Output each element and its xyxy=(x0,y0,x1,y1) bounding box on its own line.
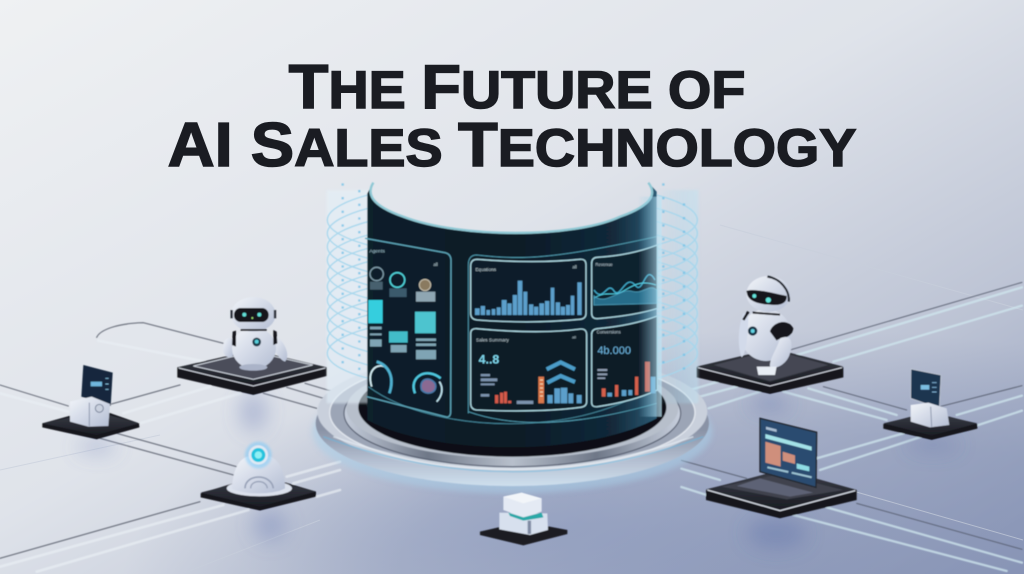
panel: device metrics xyxy=(365,238,451,417)
node: laptop xyxy=(706,418,857,518)
title xyxy=(168,52,856,180)
holographic coil left and right xyxy=(327,180,698,403)
panel: bar chart xyxy=(468,237,657,422)
panel: line chart: Revenue xyxy=(595,262,613,267)
gauges xyxy=(370,362,442,402)
node: left monitor device xyxy=(42,365,139,439)
status icons xyxy=(370,267,435,302)
metric blocks xyxy=(368,300,436,359)
node: right monitor device xyxy=(883,369,977,440)
panel: bar chart: all xyxy=(572,265,577,270)
panel: device metrics: Agents xyxy=(369,249,385,255)
panel: bar chart: Equations xyxy=(475,267,497,272)
robot body right xyxy=(739,276,793,375)
panel: value xyxy=(592,316,657,407)
right network nodes xyxy=(681,276,1022,571)
node: left robot xyxy=(177,297,327,395)
node: right robot xyxy=(697,276,843,394)
center pedestal xyxy=(312,180,712,493)
laptop screen xyxy=(760,418,817,487)
title line 1: THE FUTURE OF xyxy=(289,52,745,122)
left network nodes xyxy=(0,297,340,572)
title line 2: AI SALES TECHNOLOGY xyxy=(168,110,856,180)
node: bottom box device xyxy=(480,493,567,545)
panel: line chart xyxy=(592,245,657,319)
pedestal disks xyxy=(312,352,712,493)
curved dashboard screen xyxy=(365,183,662,447)
robot body xyxy=(223,297,287,371)
panel: device metrics: all xyxy=(433,262,438,267)
floor conduits right xyxy=(681,282,1022,571)
panel: stats: 4..8 xyxy=(479,352,499,366)
node: beacon device xyxy=(201,442,316,511)
panel: stats xyxy=(471,329,587,411)
glass edge glow xyxy=(638,197,662,417)
panel: value: Conversions xyxy=(597,329,621,334)
panel: stats: all xyxy=(572,334,576,339)
floor conduits left xyxy=(0,323,340,572)
panel: stats: Sales Summary xyxy=(476,337,510,342)
platform shadows xyxy=(77,392,287,542)
panel: value: 4b.000 xyxy=(597,345,631,357)
platform shadows right xyxy=(747,395,960,548)
